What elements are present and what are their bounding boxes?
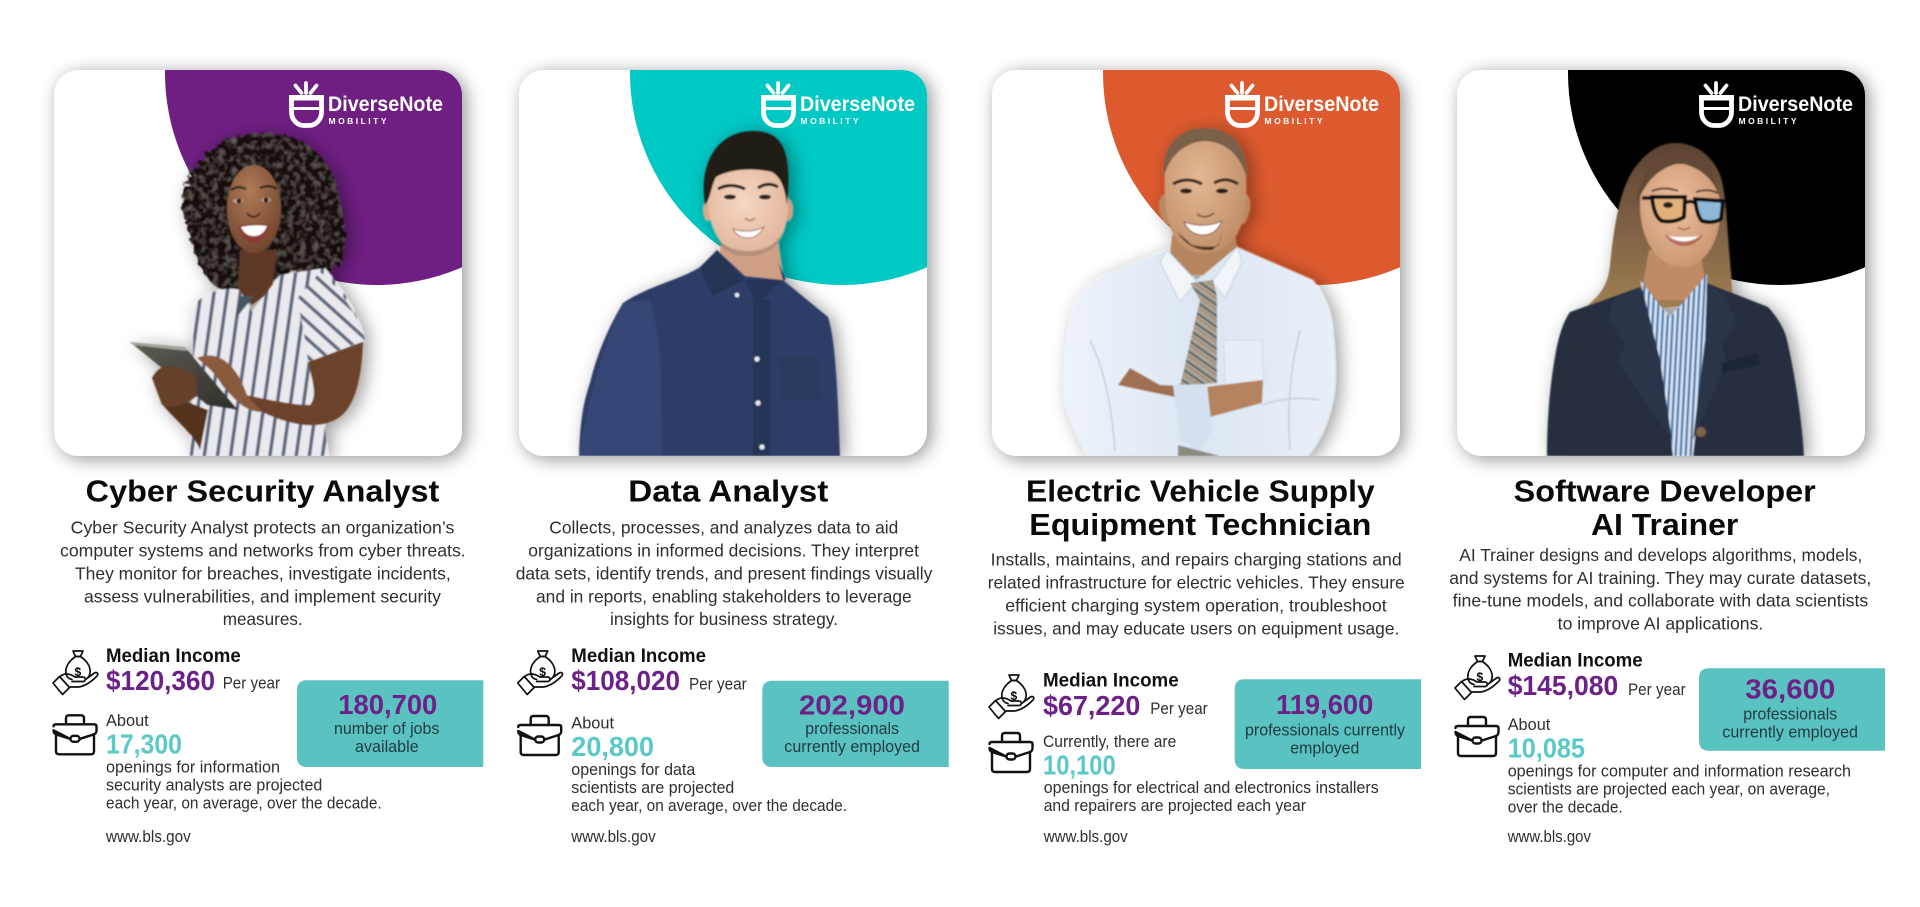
description: Collects, processes, and analyzes data to aid: [549, 518, 898, 538]
heading: [1514, 474, 1816, 542]
openings text: [1043, 733, 1379, 815]
icon: money bag in hand: [53, 651, 98, 694]
callout: jobs available: [297, 680, 483, 767]
source: www.bls.gov: [1507, 828, 1592, 846]
callout: professionals employed: [762, 681, 949, 767]
openings text: [571, 714, 847, 815]
icon: briefcase: [54, 715, 96, 754]
icon: money bag in hand: [989, 675, 1034, 718]
median income: $145,080: [1508, 670, 1618, 701]
icon: money bag in hand: [1455, 656, 1500, 700]
source: www.bls.gov: [1043, 828, 1128, 846]
icon: money bag in hand: $: [539, 665, 546, 679]
logo: DiverseNote Mobility: [1699, 83, 1853, 126]
median income: $120,360: [106, 665, 215, 696]
median income: [1043, 670, 1208, 721]
median income: Per year: [1628, 681, 1686, 699]
icon: briefcase: [518, 716, 561, 755]
median income: Median Income: [571, 645, 706, 667]
median income: Per year: [689, 675, 747, 693]
logo: DiverseNote Mobility: [761, 83, 915, 126]
description: issues, and may educate users on equipment usage.: [993, 618, 1399, 638]
heading: Cyber Security Analyst: [86, 474, 439, 509]
logo: DiverseNote Mobility: [289, 83, 443, 126]
icon: money bag in hand: $: [74, 665, 82, 679]
callout: professionals employed: professionals currently: [1245, 722, 1406, 740]
portrait card: Data Analyst: [511, 61, 943, 471]
callout: professionals employed: currently employed: [1722, 723, 1858, 741]
openings text: over the decade.: [1508, 799, 1623, 817]
openings text: 20,800: [571, 731, 654, 762]
openings text: and repairers are projected each year: [1044, 797, 1306, 815]
logo: DiverseNote Mobility: [1225, 83, 1379, 126]
openings text: About: [106, 712, 149, 730]
median income: Per year: [223, 675, 280, 693]
photo: woman in blazer with glasses: [1547, 143, 1804, 456]
heading: AI Trainer: [1591, 507, 1738, 542]
description: and systems for AI training. They may curate datasets,: [1449, 568, 1871, 588]
callout: jobs available: number of jobs: [334, 720, 439, 738]
median income: [1508, 650, 1686, 701]
openings text: openings for information: [106, 758, 280, 776]
description: organizations in informed decisions. They interpret: [528, 541, 919, 561]
description: related infrastructure for electric vehicles. They ensure: [988, 573, 1405, 593]
callout: professionals employed: professionals: [1743, 705, 1837, 723]
panel: Software Developer AI Trainer: [1449, 61, 1885, 846]
callout: professionals employed: 119,600: [1276, 689, 1373, 720]
logo: DiverseNote Mobility: DiverseNote: [800, 92, 915, 116]
logo: DiverseNote Mobility: MOBILITY: [800, 116, 859, 126]
openings text: 17,300: [106, 728, 182, 759]
description: [988, 550, 1405, 638]
source: www.bls.gov: [570, 828, 656, 846]
callout: jobs available: available: [355, 738, 419, 756]
panel: Electric Vehicle Supply Equipment Technician: [984, 61, 1421, 846]
openings text: 10,100: [1043, 749, 1116, 780]
description: [60, 518, 466, 629]
heading: Data Analyst: [628, 474, 828, 509]
heading: Software Developer: [1514, 474, 1816, 509]
callout: professionals employed: [1235, 679, 1421, 769]
logo: DiverseNote Mobility: DiverseNote: [328, 92, 443, 116]
portrait card: EV technician: [984, 61, 1416, 471]
description: [516, 518, 933, 629]
openings text: scientists are projected each year, on average,: [1508, 781, 1830, 799]
callout: professionals employed: employed: [1290, 740, 1359, 758]
openings text: security analysts are projected: [106, 776, 322, 794]
description: [1449, 545, 1871, 634]
logo: DiverseNote Mobility: DiverseNote: [1264, 92, 1379, 116]
openings text: [1508, 716, 1851, 817]
description: measures.: [223, 609, 303, 629]
portrait card: AI Trainer: [1449, 61, 1881, 471]
description: AI Trainer designs and develops algorithms, models,: [1459, 545, 1862, 565]
median income: Per year: [1150, 700, 1208, 718]
openings text: openings for computer and information research: [1508, 762, 1851, 780]
description: assess vulnerabilities, and implement security: [84, 586, 441, 606]
description: Cyber Security Analyst protects an organization’s: [71, 518, 455, 538]
description: computer systems and networks from cyber threats.: [60, 541, 466, 561]
openings text: scientists are projected: [571, 779, 734, 797]
logo: DiverseNote Mobility: MOBILITY: [1264, 116, 1323, 126]
logo: DiverseNote Mobility: MOBILITY: [328, 116, 387, 126]
icon: money bag in hand: [518, 651, 562, 694]
logo: DiverseNote Mobility: DiverseNote: [1738, 92, 1853, 116]
description: fine-tune models, and collaborate with data scientists: [1453, 591, 1869, 611]
photo: woman with tablet: [130, 133, 365, 456]
median income: Median Income: [1508, 650, 1643, 672]
openings text: About: [571, 714, 614, 732]
median income: [106, 645, 280, 696]
photo: man in blue shirt: [579, 131, 840, 456]
openings text: 10,085: [1508, 732, 1585, 763]
icon: briefcase: [1456, 717, 1498, 756]
icon: money bag in hand: $: [1010, 689, 1018, 703]
heading: Equipment Technician: [1029, 507, 1371, 542]
photo: man with crossed arms: [1064, 128, 1335, 456]
portrait card: Cyber Security Analyst: [46, 61, 478, 471]
panel: Cyber Security Analyst: [46, 61, 484, 846]
openings text: each year, on average, over the decade.: [106, 795, 382, 813]
median income: $67,220: [1043, 690, 1140, 721]
openings text: Currently, there are: [1043, 733, 1176, 751]
callout: professionals employed: 36,600: [1745, 674, 1835, 705]
callout: professionals employed: currently employed: [784, 738, 920, 756]
description: They monitor for breaches, investigate incidents,: [75, 563, 451, 583]
icon: money bag in hand: $: [1476, 670, 1484, 684]
panel: Data Analyst: [511, 61, 949, 846]
heading: Electric Vehicle Supply: [1026, 474, 1375, 509]
openings text: [106, 712, 382, 813]
description: insights for business strategy.: [610, 609, 838, 629]
callout: professionals employed: 202,900: [799, 690, 905, 720]
openings text: each year, on average, over the decade.: [571, 797, 847, 815]
openings text: openings for data: [571, 761, 696, 779]
description: data sets, identify trends, and present findings visually: [516, 563, 933, 583]
median income: Median Income: [1043, 670, 1179, 692]
description: and in reports, enabling stakeholders to leverage: [536, 586, 912, 606]
median income: Median Income: [106, 645, 241, 667]
openings text: openings for electrical and electronics installers: [1044, 779, 1379, 797]
callout: professionals employed: professionals: [805, 720, 899, 738]
description: efficient charging system operation, troubleshoot: [1005, 595, 1387, 615]
icon: briefcase: [990, 733, 1032, 772]
description: to improve AI applications.: [1558, 614, 1763, 634]
source: www.bls.gov: [105, 828, 191, 846]
openings text: About: [1508, 716, 1551, 734]
median income: [571, 645, 747, 696]
heading: [1026, 474, 1375, 542]
logo: DiverseNote Mobility: MOBILITY: [1738, 116, 1797, 126]
median income: $108,020: [571, 665, 680, 696]
description: Installs, maintains, and repairs charging stations and: [991, 550, 1402, 570]
callout: professionals employed: [1699, 668, 1885, 751]
callout: jobs available: 180,700: [338, 689, 437, 720]
